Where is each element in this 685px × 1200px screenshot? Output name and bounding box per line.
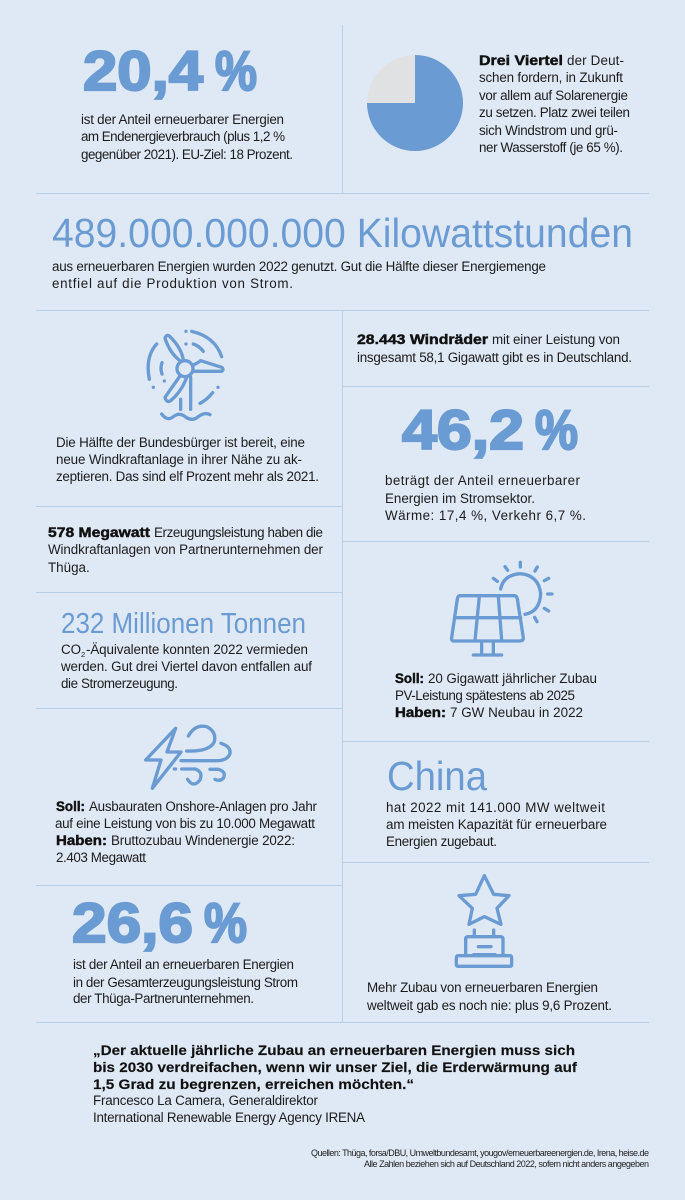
text: Soll Ausbauraten Onshore: Bruttozubau Windenergie 2022:: [111, 833, 295, 848]
quote: International Renewable Energy Agency IRENA: [93, 1110, 365, 1125]
text: Mehr Zubau: weltweit gab es noch nie: plus 9,6 Prozent.: [366, 998, 612, 1013]
stat: 46,2 %: Energien im Stromsektor.: [385, 491, 535, 506]
quote: [93, 1042, 577, 1125]
heading: 489 billion kilowatt hours: aus erneuerbaren Energien wurden 2022 genutzt. Gut die Hälfte dieser Energiemenge: [52, 259, 546, 274]
stat: 232 Millionen Tonnen: 232 Millionen Tonnen: [61, 608, 306, 640]
text: Soll 20 Gigawatt: [395, 671, 597, 720]
stat: 232 Millionen Tonnen: die Stromerzeugung.: [61, 676, 178, 691]
stat: 20,4 %: 20,4: [83, 39, 203, 102]
text: Soll 20 Gigawatt: 20 Gigawatt jährlicher Zubau: [428, 671, 597, 686]
stat: 26,6 %: der Thüga-Partnerunternehmen.: [73, 991, 254, 1006]
stat: 20,4 %: am Endenergieverbrauch (plus 1,2 %: [81, 129, 285, 144]
icon: lightning and wind: [146, 726, 230, 788]
stat: 232 Millionen Tonnen: [60, 608, 312, 691]
text: Soll Ausbauraten Onshore: Soll:: [56, 799, 85, 814]
stat: 20,4 %: [81, 39, 293, 162]
text: Soll Ausbauraten Onshore: Ausbauraten Onshore-Anlagen pro Jahr: [89, 799, 318, 814]
stat: 46,2 %: beträgt der Anteil erneuerbarer: [385, 473, 581, 488]
text: Drei Viertel: vor allem auf Solarenergie: [479, 88, 628, 103]
quote: Francesco La Camera, Generaldirektor: [93, 1093, 319, 1108]
text: Hälfte der Bundesbürger: neue Windkraftanlage in ihrer Nähe zu ak-: [56, 452, 302, 467]
text: Soll Ausbauraten Onshore: Haben:: [56, 833, 107, 848]
text: 28.443 Windräder: [357, 332, 632, 365]
stat: 232 Millionen Tonnen: -Äquivalente konnten 2022 vermieden: [86, 642, 308, 657]
text: 578 Megawatt: Windkraftanlagen von Partnerunternehmen der: [48, 542, 324, 557]
stat: 232 Millionen Tonnen: werden. Gut drei Viertel davon entfallen auf: [60, 659, 312, 674]
icon: star trophy: [456, 876, 512, 966]
sources: [311, 1148, 649, 1169]
text: Soll Ausbauraten Onshore: auf eine Leistung von bis zu 10.000 Megawatt: [55, 816, 315, 831]
text: Drei Viertel: Drei Viertel: [479, 53, 563, 68]
text: 28.443 Windräder: mit einer Leistung von: [492, 332, 620, 347]
text: Drei Viertel: zu setzen. Platz zwei teilen: [479, 105, 630, 120]
icon: solar panel and sun: [452, 562, 552, 655]
text: Drei Viertel: schen fordern, in Zukunft: [479, 70, 623, 85]
text: 578 Megawatt: Erzeugungsleistung haben die: [154, 525, 323, 540]
pie chart: three quarters: [367, 55, 463, 151]
text: Drei Viertel: ner Wasserstoff (je 65 %).: [479, 140, 623, 155]
stat: 232 Millionen Tonnen: 2: [81, 650, 85, 659]
heading: 489 billion kilowatt hours: [52, 210, 633, 291]
text: Hälfte der Bundesbürger: Die Hälfte der Bundesbürger ist bereit, eine: [56, 435, 305, 450]
sources: Quellen: Thüga, forsa/DBU, Umweltbundesamt, yougov/erneuerbareenergien.de, Irena, heise.de: [311, 1148, 649, 1158]
text: Soll Ausbauraten Onshore: 2.403 Megawatt: [56, 850, 146, 865]
heading: 489 billion kilowatt hours: 489.000.000.000 Kilowattstunden: [52, 210, 633, 256]
stat: 46,2 %: [385, 398, 586, 523]
text: Drei Viertel: [479, 53, 630, 155]
text: Mehr Zubau: Mehr Zubau von erneuerbaren Energien: [367, 980, 598, 995]
stat: 26,6 %: [72, 891, 298, 1006]
stat: 20,4 %: %: [215, 39, 257, 102]
text: Soll 20 Gigawatt: PV-Leistung spätestens ab 2025: [395, 688, 575, 703]
text: Hälfte der Bundesbürger: [56, 435, 319, 484]
text: 578 Megawatt: [48, 525, 324, 575]
stat: 20,4 %: ist der Anteil erneuerbarer Energien: [81, 112, 284, 127]
text: Soll Ausbauraten Onshore: [55, 799, 318, 865]
text: Drei Viertel: sich Windstrom und grü-: [479, 123, 618, 138]
text: 28.443 Windräder: insgesamt 58,1 Gigawatt gibt es in Deutschland.: [357, 350, 632, 365]
stat: 232 Millionen Tonnen: CO: [61, 642, 81, 657]
heading: 489 billion kilowatt hours: entfiel auf die Produktion von Strom.: [52, 276, 293, 291]
text: Soll 20 Gigawatt: 7 GW Neubau in 2022: [450, 705, 583, 720]
text: 578 Megawatt: Thüga.: [48, 560, 90, 575]
quote: bis 2030 verdreifachen, wenn wir unser Ziel, die Erderwärmung auf: [93, 1059, 577, 1075]
text: Soll 20 Gigawatt: Haben:: [395, 705, 446, 720]
stat: China: China: [387, 753, 487, 799]
stat: 20,4 %: gegenüber 2021). EU-Ziel: 18 Prozent.: [81, 147, 293, 162]
stat: China: hat 2022 mit 141.000 MW weltweit: [386, 800, 605, 815]
stat: China: Energien zugebaut.: [386, 834, 497, 849]
sources: Alle Zahlen beziehen sich auf Deutschland 2022, sofern nicht anders angegeben: [364, 1159, 649, 1169]
text: Drei Viertel: der Deut-: [567, 53, 624, 68]
stat: China: am meisten Kapazität für erneuerbare: [386, 817, 607, 832]
text: 28.443 Windräder: 28.443 Windräder: [357, 332, 489, 347]
stat: 46,2 %: Wärme: 17,4 %, Verkehr 6,7 %.: [385, 508, 586, 523]
stat: 26,6 %: in der Gesamterzeugungsleistung Strom: [73, 975, 298, 990]
text: 578 Megawatt: 578 Megawatt: [48, 525, 151, 540]
icon: wind turbine: [148, 331, 223, 419]
stat: China: [386, 753, 607, 849]
text: Soll 20 Gigawatt: Soll:: [395, 671, 424, 686]
stat: 26,6 %: ist der Anteil an erneuerbaren Energien: [73, 957, 294, 972]
stat: 46,2 %: %: [535, 398, 578, 461]
text: Mehr Zubau: [366, 980, 612, 1013]
stat: 26,6 %: 26,6: [72, 891, 193, 954]
stat: 26,6 %: %: [204, 891, 247, 954]
text: Hälfte der Bundesbürger: zeptieren. Das sind elf Prozent mehr als 2021.: [56, 469, 319, 484]
quote: 1,5 Grad zu begrenzen, erreichen möchten.“: [93, 1076, 414, 1092]
quote: „Der aktuelle jährliche Zubau an erneuerbaren Energien muss sich: [93, 1042, 575, 1058]
stat: 46,2 %: 46,2: [402, 398, 524, 461]
